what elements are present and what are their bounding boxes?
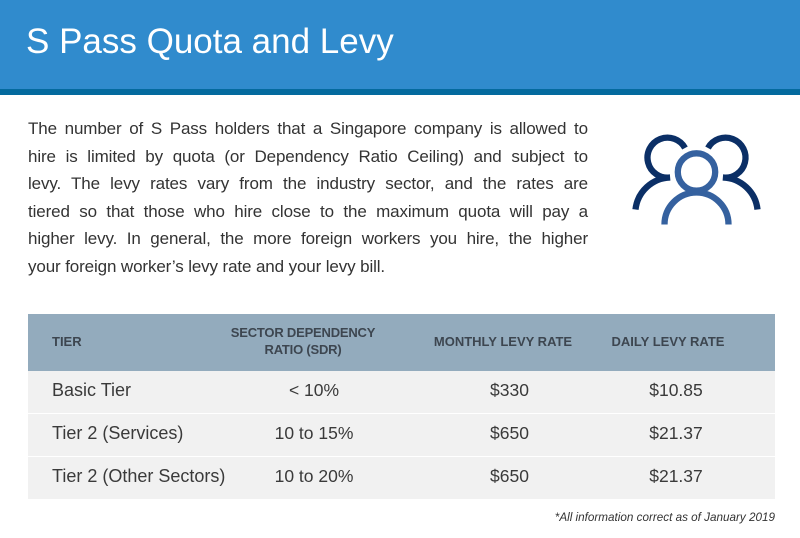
- basic tier SDR: < 10%: [289, 380, 339, 400]
- column heading: SDR: SECTOR DEPENDENCY: [231, 325, 375, 340]
- tier 2 other sectors label: Tier 2 (Other Sectors): [52, 466, 225, 486]
- row: basic tier: [28, 371, 775, 413]
- basic tier monthly: $330: [490, 380, 529, 400]
- column heading: SDR: [231, 325, 376, 357]
- basic tier label: Basic Tier: [52, 380, 131, 400]
- intro paragraph: levy. The levy rates vary from the industry sector, and the rates are: [28, 174, 588, 193]
- header banner: [0, 0, 800, 95]
- tier 2 services monthly: $650: [490, 423, 529, 443]
- column heading: monthly levy rate: MONTHLY LEVY RATE: [434, 334, 572, 349]
- column heading: tier: TIER: [52, 334, 82, 349]
- tier 2 services daily: $21.37: [649, 423, 703, 443]
- tier 2 services label: Tier 2 (Services): [52, 423, 183, 443]
- intro paragraph: tiered so that those who hire close to the maximum quota will pay a: [28, 202, 588, 221]
- icon: group of people: [632, 134, 761, 224]
- intro paragraph: higher levy. In general, the more foreign workers you hire, the higher: [28, 229, 588, 248]
- tier 2 other sectors SDR: 10 to 20%: [275, 466, 353, 486]
- header bottom band: [0, 89, 800, 95]
- intro paragraph: The number of S Pass holders that a Singapore company is allowed to: [28, 119, 588, 138]
- column heading: SDR: RATIO (SDR): [264, 342, 342, 357]
- footnote: *All information correct as of January 2019: [555, 511, 775, 524]
- intro paragraph: [28, 119, 588, 276]
- row: tier 2 other sectors: [28, 457, 775, 499]
- tier 2 services SDR: 10 to 15%: [275, 423, 353, 443]
- table header row: [28, 314, 775, 371]
- levy table: [28, 314, 775, 499]
- row: tier 2 services: [28, 414, 775, 456]
- title: S Pass Quota and Levy: [26, 22, 394, 61]
- basic tier daily: $10.85: [649, 380, 703, 400]
- column heading: daily levy rate: DAILY LEVY RATE: [612, 334, 724, 349]
- intro paragraph: hire is limited by quota (or Dependency Ratio Ceiling) and subject to: [28, 147, 588, 166]
- tier 2 other sectors daily: $21.37: [649, 466, 703, 486]
- intro paragraph: your foreign worker’s levy rate and your levy bill.: [28, 257, 385, 276]
- tier 2 other sectors monthly: $650: [490, 466, 529, 486]
